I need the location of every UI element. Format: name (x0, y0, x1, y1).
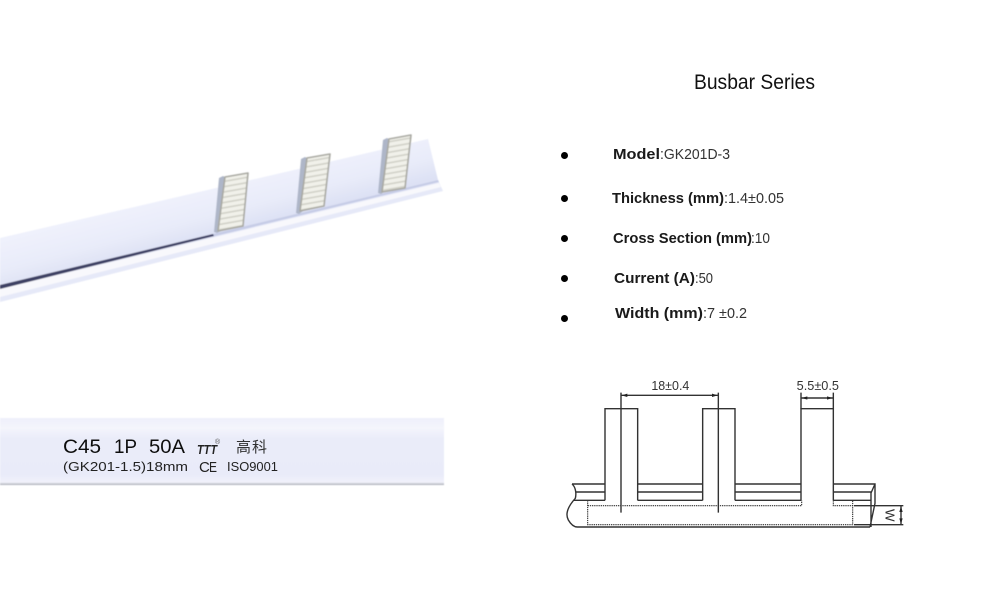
photo: busbar with three pins (0, 135, 443, 302)
label: W: W (883, 509, 898, 522)
hidden conductor dashed outline (588, 500, 853, 525)
bar front lip (0, 180, 443, 302)
CE mark: E (209, 459, 217, 476)
pin 3 outline (801, 409, 833, 500)
pin 2 (296, 154, 330, 214)
spec: thickness: :1.4±0.05 (724, 190, 784, 207)
bar body (0, 418, 444, 485)
dimension: W arrow (854, 506, 903, 525)
spec: thickness (561, 190, 784, 207)
pin 3 (378, 135, 411, 194)
dimension: pin width arrow (801, 393, 833, 409)
photo: printed busbar side (0, 418, 444, 485)
spec: thickness: Thickness (mm) (612, 190, 724, 207)
spec: cross section: Cross Section (mm) (613, 230, 752, 247)
CE mark: C (199, 459, 210, 476)
printed logo: TTT (197, 442, 218, 457)
printed line 1: 1P (114, 437, 137, 458)
printed brand: 高科 (236, 439, 267, 456)
spec: cross section (561, 230, 770, 247)
printed line 1: C45 (63, 437, 101, 458)
spec: width: Width (mm) (615, 305, 703, 322)
dimension diagram (567, 378, 903, 527)
bar top surface (0, 139, 438, 286)
spec: model: Model (613, 146, 660, 163)
title: Busbar Series (694, 71, 815, 94)
spec list (561, 146, 784, 322)
CE mark (199, 459, 217, 476)
printed line 2: (GK201-1.5)18mm (63, 459, 188, 474)
spec: model: :GK201D-3 (660, 146, 730, 163)
spec: width (561, 305, 747, 322)
rail outline (567, 484, 875, 527)
printed logo: ® (215, 438, 221, 446)
printed line 1 (63, 437, 185, 458)
spec: current: :50 (695, 270, 713, 287)
label: pin width: 5.5±0.5 (797, 378, 839, 393)
dimension: pitch arrow (621, 394, 718, 397)
spec: current (561, 270, 713, 287)
spec: model (561, 146, 730, 163)
spec: current: Current (A) (614, 270, 695, 287)
spec: cross section: :10 (751, 230, 770, 247)
dark groove (0, 234, 214, 289)
center lines (621, 393, 718, 513)
spec: width: :7 ±0.2 (703, 305, 747, 322)
pin 1 (214, 173, 248, 233)
label: pitch: 18±0.4 (651, 378, 690, 393)
pin 2 outline (703, 409, 735, 500)
pin 1 outline (605, 409, 638, 500)
printed line 2 certificate: ISO9001 (227, 459, 278, 474)
printed line 1: 50A (149, 437, 185, 458)
